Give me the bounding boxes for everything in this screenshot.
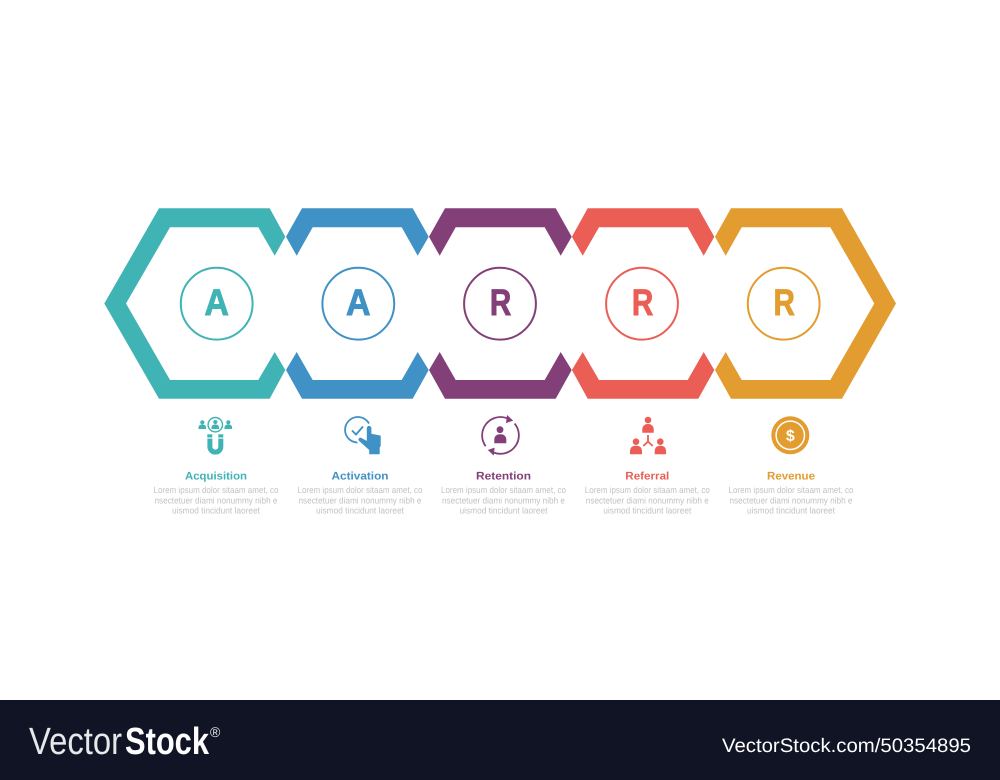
text block: acquisition: nsectetuer diami nonummy nibh e [154,496,278,506]
text block: referral: nsectetuer diami nonummy nibh e [586,496,709,506]
letter badge: A [322,268,394,340]
text block: revenue: Lorem ipsum dolor sitaam amet, co [728,485,854,495]
letter badge: R: R [632,282,653,323]
footer image id: VectorStock.com/50354895 [722,735,971,757]
text block: activation: uismod tincidunt laoreet [316,506,404,516]
text block: revenue: nsectetuer diami nonummy nibh e [730,496,852,506]
text block: retention: Lorem ipsum dolor sitaam amet, co [441,485,566,495]
text block: acquisition: Lorem ipsum dolor sitaam amet, co [154,485,278,495]
text block: retention: uismod tincidunt laoreet [460,506,548,516]
icon: referral network [630,417,666,454]
text block: referral: Referral [625,470,669,482]
footer bar [0,700,1000,780]
hexagon: referral [572,208,714,399]
letter badge: R [748,268,820,340]
text block: referral [585,470,710,516]
letter badge: R [606,268,678,340]
hexagon: acquisition [104,208,285,399]
letter badge: R: R [490,282,511,323]
text block: activation: Lorem ipsum dolor sitaam amet, co [298,485,422,495]
text block: activation: nsectetuer diami nonummy nibh e [298,496,422,506]
footer logo [29,721,221,763]
footer logo: Stock [125,721,210,763]
text block: acquisition [154,470,278,516]
text block: retention: nsectetuer diami nonummy nibh e [442,496,565,506]
text block: acquisition: uismod tincidunt laoreet [172,506,260,516]
hexagon: revenue [715,208,896,399]
icon: hand tapping check [345,417,381,454]
text block: revenue: uismod tincidunt laoreet [747,506,835,516]
icon: dollar coin: $ [786,428,795,445]
letter badge: A: A [346,282,371,323]
text block: referral: Lorem ipsum dolor sitaam amet, co [585,485,710,495]
text block: referral: uismod tincidunt laoreet [603,506,692,516]
icon: dollar coin [771,416,809,454]
icon: circular arrows around person [482,415,519,456]
letter badge: R: R [774,282,795,323]
icon: magnet attracting people [198,418,232,452]
text block: retention: Retention [476,470,531,482]
hexagon: activation [286,208,429,399]
letter badge: A: A [204,282,229,323]
text block: activation [298,470,422,516]
text block: revenue [728,470,854,516]
letter badge: R [464,268,536,340]
letter badge: A [181,268,253,340]
hexagon: retention [429,208,572,399]
text block: retention [441,470,566,516]
text block: activation: Activation [332,470,389,482]
text block: acquisition: Acquisition [185,470,247,482]
footer logo: Vector [29,721,122,763]
text block: revenue: Revenue [767,470,815,482]
footer logo: ® [210,724,221,740]
